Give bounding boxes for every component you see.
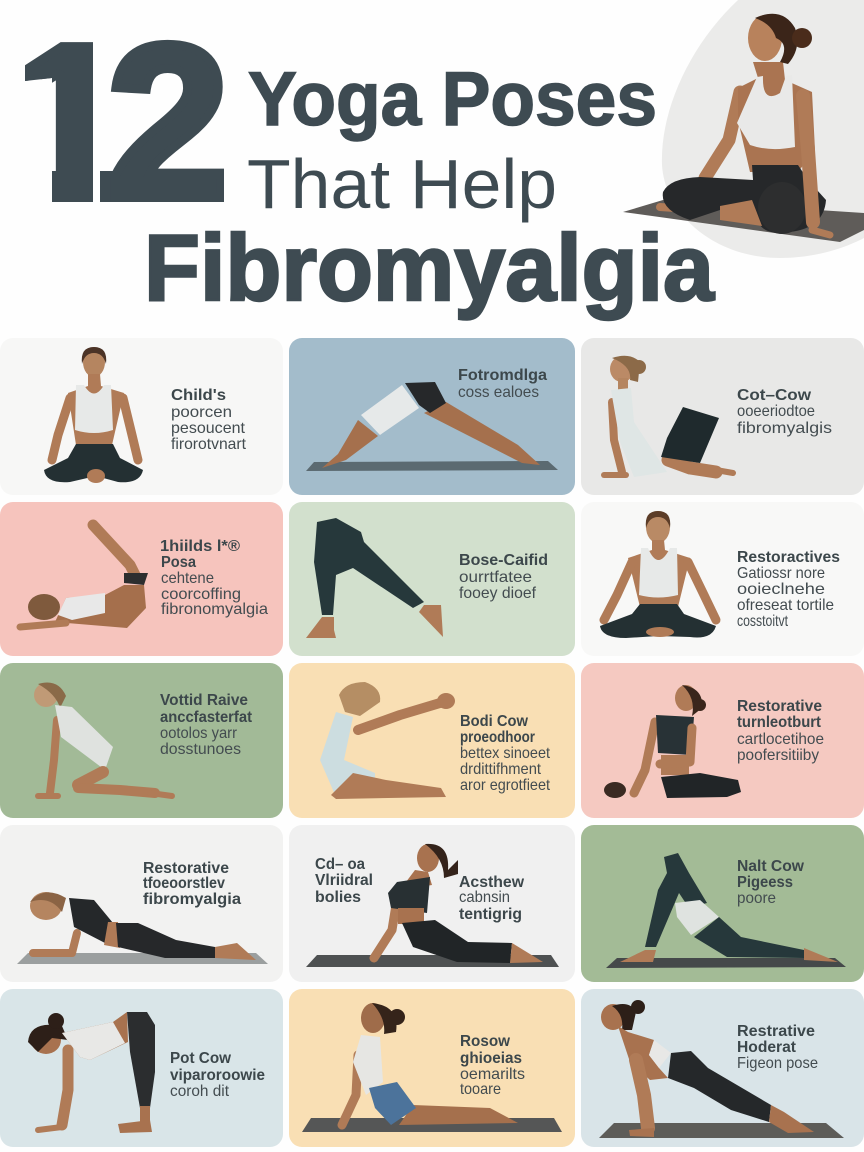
text (171, 387, 247, 453)
text (143, 860, 241, 908)
title line: That Help: That Help (247, 145, 557, 223)
text: proeodhoor (460, 729, 535, 746)
text: Bose-Caifid (459, 552, 548, 569)
figure (306, 518, 443, 638)
text left (315, 856, 373, 906)
panel 8: seated forward reach (289, 663, 575, 818)
text: cehtene (161, 570, 214, 587)
text right (459, 874, 525, 923)
text: aror egrotfieet (460, 777, 551, 794)
text: cosstoitvt (737, 613, 788, 630)
text (170, 1050, 265, 1100)
panel 11: cobra with dark top (289, 825, 575, 982)
text: tfoeoorstlev (143, 875, 225, 892)
title (25, 40, 716, 322)
panel 6: restorative seated (581, 502, 864, 656)
panel 15: high plank (581, 989, 864, 1147)
text: Fotromdlga (458, 367, 547, 384)
figure (28, 1012, 155, 1133)
title number 12: 1 (9, 0, 131, 245)
text: Restrative (737, 1023, 815, 1040)
hero backdrop blob (662, 0, 864, 258)
figure (306, 382, 558, 471)
text: oemarilts (460, 1066, 525, 1083)
panel 1: seated pose (0, 338, 283, 495)
text (458, 367, 547, 401)
text: poofersitiiby (737, 747, 819, 764)
panel 4: child's pose variation (0, 502, 283, 656)
text: turnleotburt (737, 714, 822, 731)
text (459, 552, 548, 602)
panel 3: cat-cow seated (581, 338, 864, 495)
text: coorcoffing (161, 586, 241, 603)
text: ooieclnehe (737, 581, 825, 598)
title line: Fibromyalgia: Fibromyalgia (144, 215, 715, 320)
text: Vottid Raive (160, 692, 248, 709)
panel 13: standing forward bend (0, 989, 283, 1147)
panel 12: pigeon pose on green (581, 825, 864, 982)
panel 5: legs in forward fold (289, 502, 575, 656)
text: 1hiilds l*® (160, 538, 240, 555)
text left: Cd– oa (315, 856, 365, 873)
text: ghioeias (460, 1050, 522, 1067)
text (160, 538, 268, 618)
title line: Yoga Poses: Yoga Poses (248, 57, 657, 142)
text (460, 713, 551, 794)
figure (600, 511, 716, 638)
text: Hoderat (737, 1039, 797, 1056)
text: Pigeess (737, 874, 793, 891)
text: Pot Cow (170, 1050, 232, 1067)
figure (604, 356, 733, 477)
text: Child's (171, 387, 226, 404)
text: pesoucent (171, 420, 246, 437)
hero illustration: seated yoga figure (623, 14, 864, 242)
text left: bolies (315, 889, 361, 906)
panel 9: restorative twist (581, 663, 864, 818)
figure (604, 685, 741, 798)
figure (34, 682, 172, 796)
panel 10: low plank (0, 825, 283, 982)
panel 14: cobra with blue shorts (289, 989, 575, 1147)
text: Nalt Cow (737, 858, 805, 875)
text: Rosow (460, 1033, 511, 1050)
text: Restorative (737, 698, 822, 715)
figure (17, 892, 268, 964)
text: Restorative (143, 860, 229, 877)
text (737, 858, 805, 907)
text (737, 387, 832, 437)
text (737, 698, 824, 764)
text (737, 549, 840, 630)
figure (306, 844, 559, 967)
figure (606, 853, 846, 968)
text: poorcen (171, 404, 232, 421)
text (460, 1033, 525, 1098)
text: dosstunoes (160, 741, 241, 758)
text (160, 692, 253, 758)
text: fibromyalgis (737, 420, 832, 437)
panel 2: downward dog (289, 338, 575, 495)
text: ootolos yarr (160, 725, 238, 742)
text right: Acsthew (459, 874, 525, 891)
text: cartlocetihoe (737, 731, 824, 748)
text left: Vlriidral (315, 872, 373, 889)
text: fibromyalgia (143, 891, 241, 908)
text: viparoroowie (170, 1067, 265, 1084)
text: ourrtfatee (459, 569, 532, 586)
figure (20, 525, 148, 628)
text: ofreseat tortile (737, 597, 834, 614)
text (737, 1023, 818, 1072)
figure (44, 347, 143, 483)
text: coss ealoes (458, 384, 539, 401)
figure (320, 682, 455, 799)
title number 12: 2 (107, 0, 229, 245)
text: anccfasterfat (160, 709, 253, 726)
figure (599, 1000, 844, 1138)
text: bettex sinoeet (460, 745, 551, 762)
text: Posa (161, 554, 196, 571)
text: firorotvnart (171, 436, 247, 453)
text right: cabnsin (459, 889, 510, 906)
text: drdittifhment (460, 761, 542, 778)
text: Gatiossr nore (737, 565, 825, 582)
text: ooeeriodtoe (737, 403, 815, 420)
text: fooey dioef (459, 585, 537, 602)
text: Cot–Cow (737, 387, 812, 404)
text: fibronomyalgia (161, 601, 268, 618)
text right: tentigrig (459, 906, 522, 923)
figure (302, 1003, 562, 1132)
text: coroh dit (170, 1083, 230, 1100)
panel 7: kneeling pose (0, 663, 283, 818)
text: Figeon pose (737, 1055, 818, 1072)
text: Bodi Cow (460, 713, 529, 730)
text: poore (737, 890, 776, 907)
text: Restoractives (737, 549, 840, 566)
text: tooare (460, 1081, 501, 1098)
